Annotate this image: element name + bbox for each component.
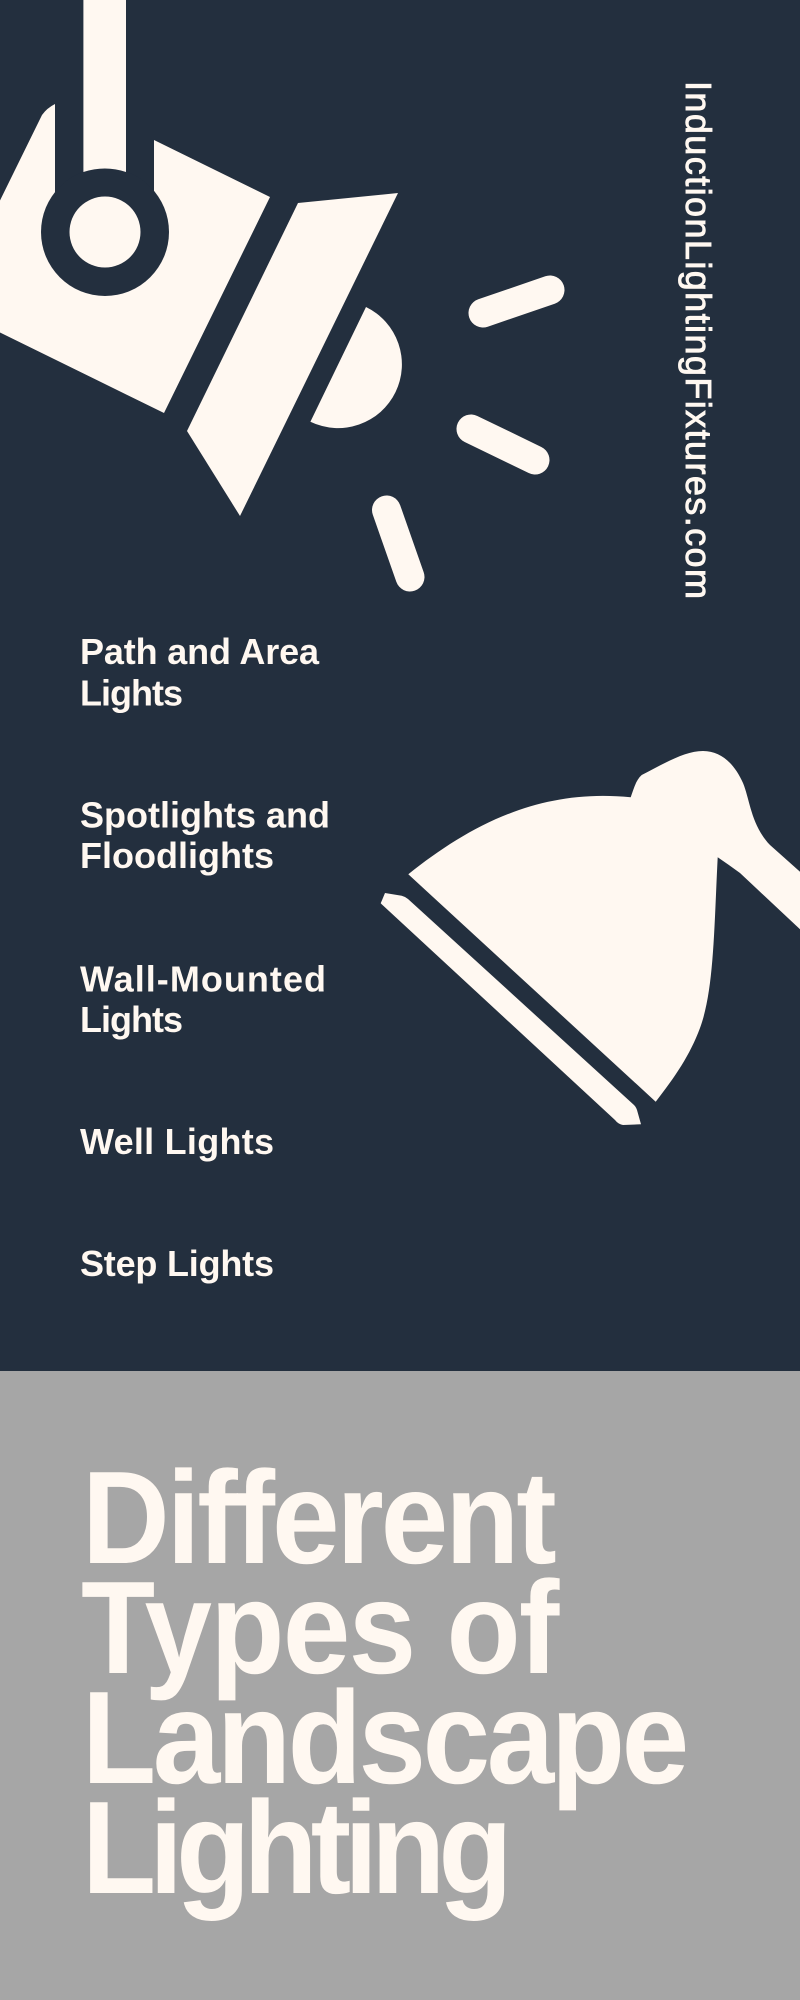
list item: Wall-Mounted Lights	[80, 958, 326, 1040]
light ray lower	[386, 510, 410, 577]
title line 4: Lighting	[82, 1773, 513, 1921]
light ray middle	[471, 429, 535, 460]
list item: Spotlights and Floodlights	[80, 794, 330, 876]
lamp shade and arm	[408, 751, 800, 1102]
light ray upper	[483, 290, 550, 313]
title line 3: Landscape	[82, 1663, 689, 1811]
spotlight pivot ring	[41, 168, 169, 296]
spotlight mounting arm	[83, 0, 126, 172]
panel: navy background	[0, 0, 800, 1371]
list item: Well Lights: Well Lights	[80, 1121, 274, 1162]
panel: grey title band	[0, 1371, 800, 2000]
list item: Path and Area Lights: Path and Area	[80, 631, 320, 672]
list item: Wall-Mounted Lights: Lights	[80, 999, 183, 1040]
spotlight flap	[187, 193, 398, 516]
list item: Wall-Mounted Lights: Wall-Mounted	[80, 958, 326, 1000]
icon: spotlight	[0, 0, 550, 577]
list of lighting types	[80, 631, 330, 1284]
lamp lower bar	[381, 893, 641, 1125]
title line 2: Types of	[81, 1553, 560, 1701]
spotlight pivot centre	[70, 196, 140, 268]
spotlight body	[0, 104, 270, 413]
list item: Path and Area Lights: Lights	[80, 672, 183, 714]
spotlight bulb	[310, 307, 402, 428]
title line 1: Different	[82, 1443, 557, 1591]
title	[81, 1443, 689, 1921]
list item: Spotlights and Floodlights: Floodlights	[80, 835, 274, 876]
list item: Spotlights and Floodlights: Spotlights and	[80, 794, 330, 836]
list item: Path and Area Lights	[80, 631, 320, 714]
icon: desk lamp	[381, 751, 800, 1125]
vertical website text: InductionLightingFixtures.com	[678, 81, 719, 599]
list item: Step Lights: Step Lights	[80, 1243, 274, 1284]
